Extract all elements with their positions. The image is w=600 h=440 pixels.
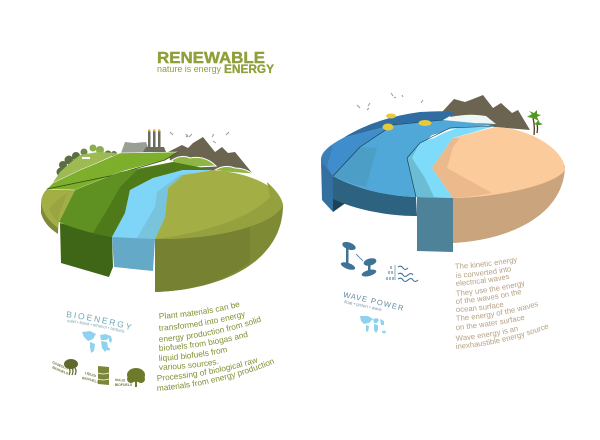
outer blue sector: [321, 120, 443, 176]
icon: mountains: [442, 95, 530, 130]
dark green sector: [59, 162, 213, 237]
dark sea band: [343, 111, 455, 138]
text block: wave power description: The kinetic energy: [454, 258, 517, 269]
text block: bioenergy description: various sources.: [158, 360, 218, 370]
outer blue sector wall: [321, 160, 333, 212]
panel: wave power label: float • piston • wave: [344, 300, 382, 311]
text block: bioenergy description: energy production from solid: [159, 316, 262, 342]
birds: [170, 132, 229, 143]
teal front wall: [417, 197, 453, 252]
icon: palm tree: [527, 110, 543, 135]
text block: wave power description: ocean surface: [456, 302, 504, 312]
icon: trees: [52, 144, 118, 184]
icon: liquid biofuels: BIOFUELS: [82, 376, 98, 384]
icon: liquid biofuels: [82, 366, 109, 385]
icon: gaseous biofuels: BIOFUELS: [52, 366, 68, 374]
panel: biofuel icons: [52, 359, 145, 387]
icon: gaseous biofuels: GASEOUS: [52, 361, 68, 370]
icon: factory: [121, 129, 166, 153]
icon: mountains: [168, 137, 253, 174]
text block: wave power description: of the waves on the: [456, 290, 522, 304]
title: RENEWABLE: [157, 50, 265, 67]
bright green sector: [47, 152, 178, 190]
panel: wave power label: [344, 292, 404, 334]
hedge behind sectors: [172, 156, 216, 168]
icon: liquid biofuels: LIQUID: [85, 372, 96, 377]
panel: bioenergy label: BIOENERGY: [66, 311, 132, 330]
icon: solid biofuels: SOLID: [115, 378, 125, 382]
text block: wave power description: is converted into: [456, 267, 511, 278]
left olive wall: [41, 203, 59, 234]
white foam behind sectors: [450, 115, 496, 124]
text block: wave power description: electrical waves: [456, 274, 510, 286]
birds: [357, 93, 423, 110]
text block: wave power description: They use the energy: [456, 281, 524, 296]
right olive top: [155, 170, 283, 239]
light blue sector: [407, 126, 495, 198]
sand wall: [453, 165, 565, 243]
dark green front: [60, 223, 113, 277]
panel: wave power icons: [340, 240, 418, 282]
text block: bioenergy description: transformed into energy: [158, 312, 244, 331]
title: ENERGY: [224, 62, 274, 76]
text block: bioenergy description: Processing of biological raw: [157, 358, 257, 381]
right olive wall: [155, 190, 283, 292]
icon: float and piston machines: [340, 240, 377, 278]
text block: wave power description: inexhaustible energy source: [456, 324, 548, 349]
text block: bioenergy description: [157, 302, 274, 391]
icon: world map: [82, 331, 112, 353]
inner wall: [333, 176, 417, 216]
left olive sector: [41, 176, 110, 228]
sand top: [432, 127, 565, 198]
text block: wave power description: [454, 258, 548, 349]
icon: solid biofuels: BIOFUELS: [115, 384, 132, 386]
text block: wave power description: on the water surface: [456, 316, 524, 330]
text block: bioenergy description: materials from energy production: [157, 360, 274, 391]
title: nature is energy: [157, 64, 221, 75]
panel: bioenergy label: [66, 311, 132, 353]
medium blue sector: [333, 120, 495, 197]
icon: waves: [387, 265, 418, 282]
icon: gaseous biofuels: [52, 359, 78, 376]
panel: bioenergy label: solid • liquid • ethanol • biofuels: [67, 320, 124, 333]
text block: bioenergy description: biofuels from biogas and: [159, 330, 248, 351]
panel: wave power disc: [321, 93, 565, 252]
text block: bioenergy description: liquid biofuels from: [159, 348, 228, 362]
text block: wave power description: The energy of the waves: [456, 302, 538, 321]
text block: wave power description: Wave energy is an: [456, 327, 518, 341]
panel: wave power label: WAVE POWER: [344, 292, 404, 311]
white foam wave: [427, 128, 457, 140]
river front: [112, 237, 155, 271]
icon: yellow floats: [382, 114, 432, 130]
title: [157, 50, 274, 76]
icon: world map: [360, 316, 386, 333]
panel: bioenergy disc: [41, 129, 283, 292]
icon: solid biofuels: [115, 368, 145, 387]
text block: bioenergy description: Plant materials can be: [159, 302, 240, 319]
river top: [112, 170, 213, 239]
